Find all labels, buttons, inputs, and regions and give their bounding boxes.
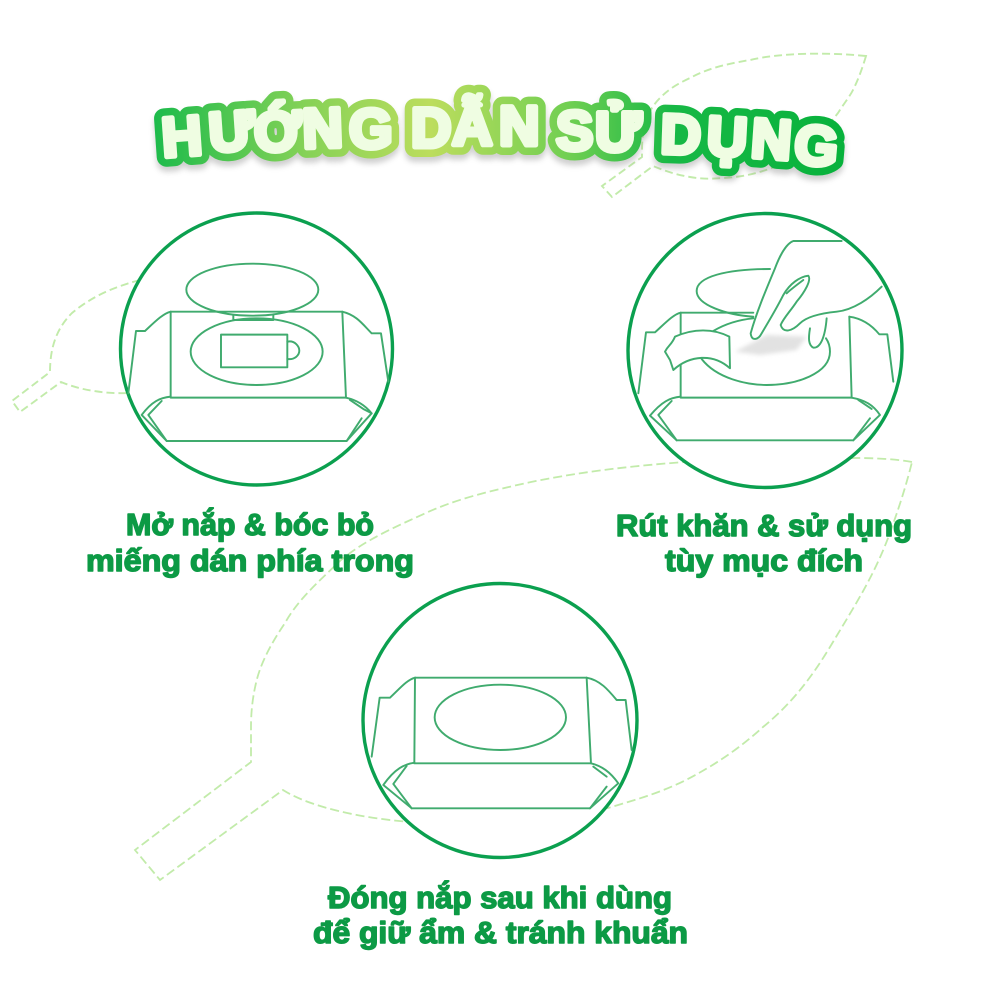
title letters: HƯỚNGDẪNSỬDỤNG bbox=[159, 94, 841, 179]
title outline: HƯỚNGDẪNSỬDỤNG bbox=[159, 94, 841, 179]
title bbox=[159, 94, 841, 184]
title shadow: HƯỚNGDẪNSỬDỤNG bbox=[159, 99, 841, 184]
step 1 opening oval bbox=[191, 318, 323, 385]
caption: step 2: tùy mục đích bbox=[665, 543, 863, 578]
step 1 open lid oval bbox=[186, 264, 318, 316]
step 2 pulled wipe bbox=[665, 330, 730, 370]
caption: step 3: Đóng nắp sau khi dùng bbox=[328, 879, 672, 915]
step 2 wipes pack illustration bbox=[638, 241, 893, 440]
caption: step 1: miếng dán phía trong bbox=[86, 543, 414, 578]
step 1 sticker bbox=[221, 335, 287, 367]
step 2 circle bbox=[628, 214, 902, 488]
step 2 wipe shadow bbox=[735, 335, 807, 355]
step 2 opening bbox=[702, 318, 830, 385]
step 3 circle bbox=[363, 584, 637, 858]
leaf outline: left bbox=[12, 280, 140, 412]
caption: step 3 bbox=[313, 879, 688, 950]
step 3 wipes pack illustration bbox=[372, 678, 632, 808]
step 3 closed lid oval bbox=[435, 685, 566, 750]
caption: step 3: để giữ ẩm & tránh khuẩn bbox=[313, 915, 688, 950]
leaf outline: large centre bbox=[135, 458, 912, 880]
caption: step 2 bbox=[616, 508, 912, 578]
caption: step 1 bbox=[86, 506, 414, 578]
step 1 circle bbox=[120, 213, 392, 485]
caption: step 1: Mở nắp & bóc bỏ bbox=[126, 506, 374, 542]
step 2 hand bbox=[751, 241, 882, 339]
panel: step 2 pull wipe bbox=[628, 214, 902, 488]
leaf outline: top right bbox=[602, 54, 866, 197]
panel: step 1 open lid bbox=[120, 213, 392, 485]
caption: step 2: Rút khăn & sử dụng bbox=[616, 508, 912, 543]
step 2 open lid bbox=[697, 269, 770, 317]
panel: step 3 close lid bbox=[363, 584, 637, 858]
step 1 wipes pack illustration bbox=[128, 264, 388, 441]
